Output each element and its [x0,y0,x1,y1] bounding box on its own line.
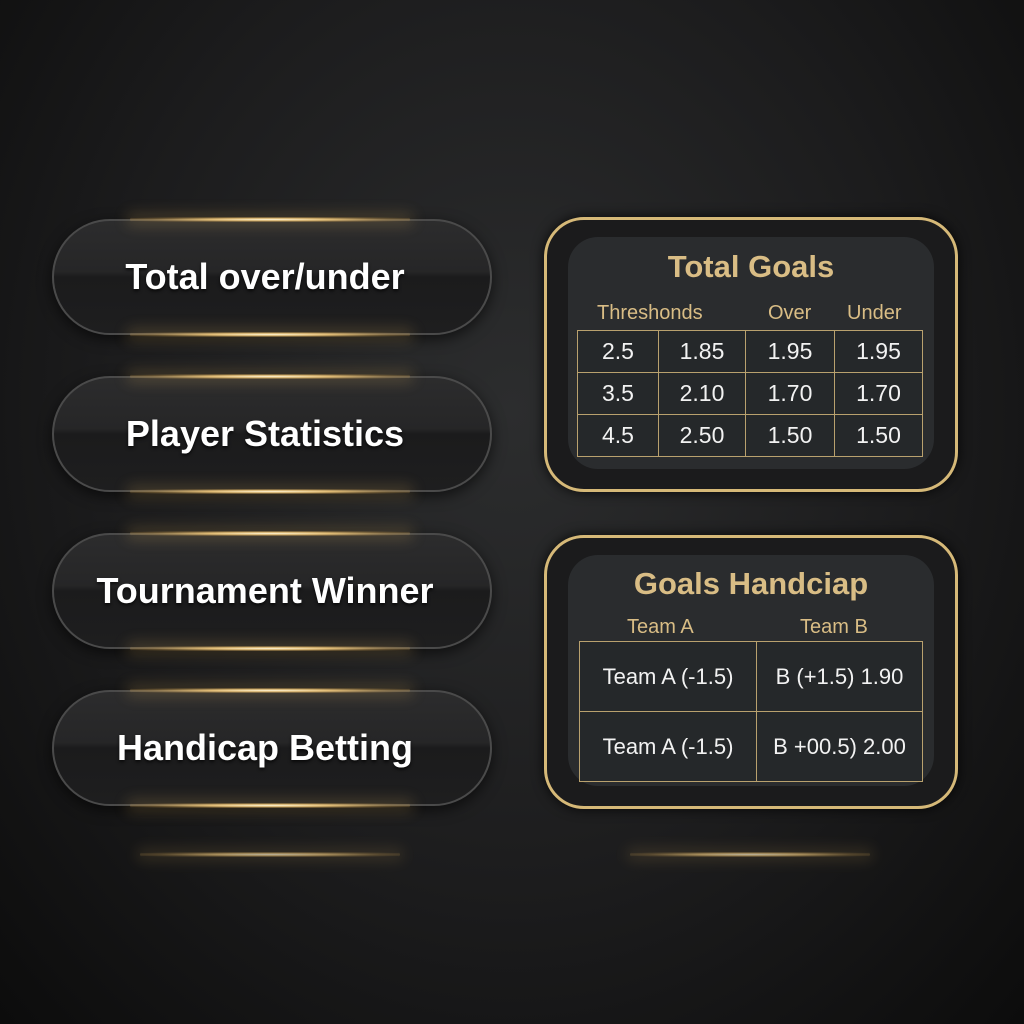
table: thresholds odds: 2.10 [680,380,724,406]
table headers: Team B [800,616,868,638]
glow: bottom right floor [630,852,870,857]
table: thresholds odds: 1.95 [768,338,812,364]
pill: Total over/under: Total over/under [125,256,405,297]
glow: bottom of pill 1 [130,332,410,337]
table headers: Team A [627,616,694,638]
table: thresholds odds: 1.85 [680,338,724,364]
panel: Total Goals [544,217,958,492]
table: thresholds odds: 1.50 [768,422,812,448]
table: thresholds odds: 3.5 [602,380,634,406]
glow: top of pill 2 [130,374,410,379]
glow: top of pill 3 [130,531,410,536]
table: handicap odds: B (+1.5) 1.90 [776,664,903,688]
panel: Goals Handicap [544,535,958,809]
table: thresholds odds [577,330,923,457]
table: handicap odds: Team A (-1.5) [603,734,733,758]
table: thresholds odds: 2.50 [680,422,724,448]
glow: bottom left floor [140,852,400,857]
pill: Player Statistics: Player Statistics [126,413,404,454]
table headers: Over [768,302,811,324]
glow: bottom of pill 3 [130,646,410,651]
glow: bottom of pill 4 [130,803,410,808]
glow: top of pill 1 [130,217,410,222]
table: handicap odds: Team A (-1.5) [603,664,733,688]
pill: Tournament Winner: Tournament Winner [96,570,434,611]
table: thresholds odds: 1.70 [768,380,812,406]
table headers: Under [847,302,901,324]
glow: top of pill 4 [130,688,410,693]
table: thresholds odds: 1.70 [856,380,901,406]
table: handicap odds: B +00.5) 2.00 [773,734,906,758]
table: thresholds odds: 1.50 [856,422,901,448]
pill: Player Statistics [52,376,492,492]
table: thresholds odds: 1.95 [856,338,901,364]
heading: Total Goals: Total Goals [668,249,834,284]
table: thresholds odds: 2.5 [602,338,634,364]
heading: Goals Handciap: Goals Handciap [634,566,868,601]
table headers [627,616,868,638]
table: thresholds odds: 4.5 [602,422,634,448]
table headers: Threshonds [597,302,703,324]
table headers [597,302,902,324]
table: handicap odds [579,641,923,782]
glow: bottom of pill 2 [130,489,410,494]
pill: Tournament Winner [52,533,492,649]
pill: Total over/under [52,219,492,335]
pill: Handicap Betting: Handicap Betting [117,727,413,768]
pill: Handicap Betting [52,690,492,806]
